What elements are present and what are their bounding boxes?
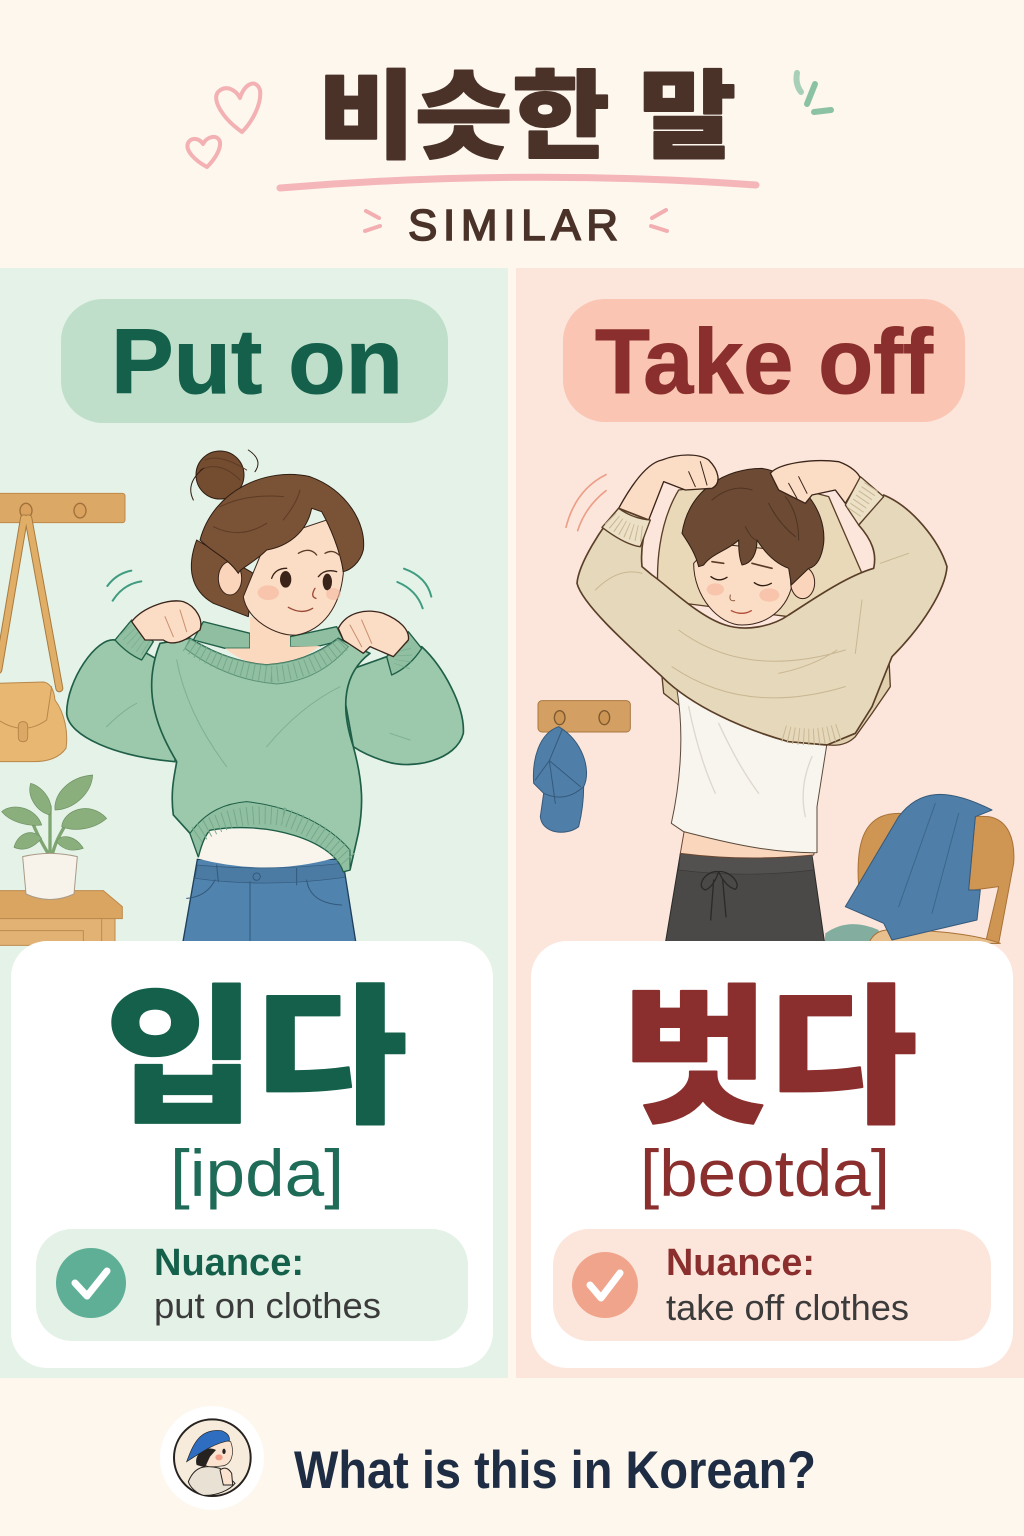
table with plant	[0, 775, 122, 945]
card: take off	[531, 941, 1013, 1368]
footer: avatar	[160, 1406, 264, 1510]
korean word: 입다	[105, 974, 407, 1142]
motion lines	[107, 569, 431, 608]
nuance box	[553, 1229, 991, 1341]
title: 비슷한 말	[318, 64, 736, 171]
subtitle: SIMILAR	[408, 201, 618, 250]
title	[280, 64, 756, 188]
nuance box: put on clothes	[154, 1285, 381, 1326]
chair with clothes	[825, 794, 1014, 943]
wall rack with bag	[0, 493, 125, 762]
nuance box: Nuance:	[666, 1242, 815, 1284]
illustration: boy taking off sweater	[533, 455, 1014, 943]
romanization: [beotda]	[640, 1136, 890, 1210]
motion lines	[566, 475, 606, 531]
wall rack with cap	[533, 701, 630, 832]
icon: hearts	[187, 84, 260, 167]
nuance box: Nuance:	[154, 1242, 304, 1284]
boy	[577, 455, 947, 943]
girl	[67, 450, 463, 943]
icon: check	[56, 1248, 126, 1318]
nuance box: take off clothes	[666, 1287, 909, 1328]
card: put on	[11, 941, 493, 1368]
icon: sparkle marks	[796, 73, 831, 112]
footer: question: What is this in Korean?	[294, 1441, 816, 1500]
label: put on: Put on	[111, 311, 403, 413]
korean word: 벗다	[622, 974, 917, 1142]
label: put on	[61, 299, 448, 423]
subtitle	[365, 201, 667, 250]
illustration: girl putting on sweater	[0, 450, 463, 945]
nuance box	[36, 1229, 468, 1341]
label: take off: Take off	[595, 311, 933, 413]
icon: check	[572, 1252, 638, 1318]
panel: take off	[516, 268, 1024, 1378]
romanization: [ipda]	[170, 1136, 344, 1210]
panel: put on	[0, 268, 508, 1378]
